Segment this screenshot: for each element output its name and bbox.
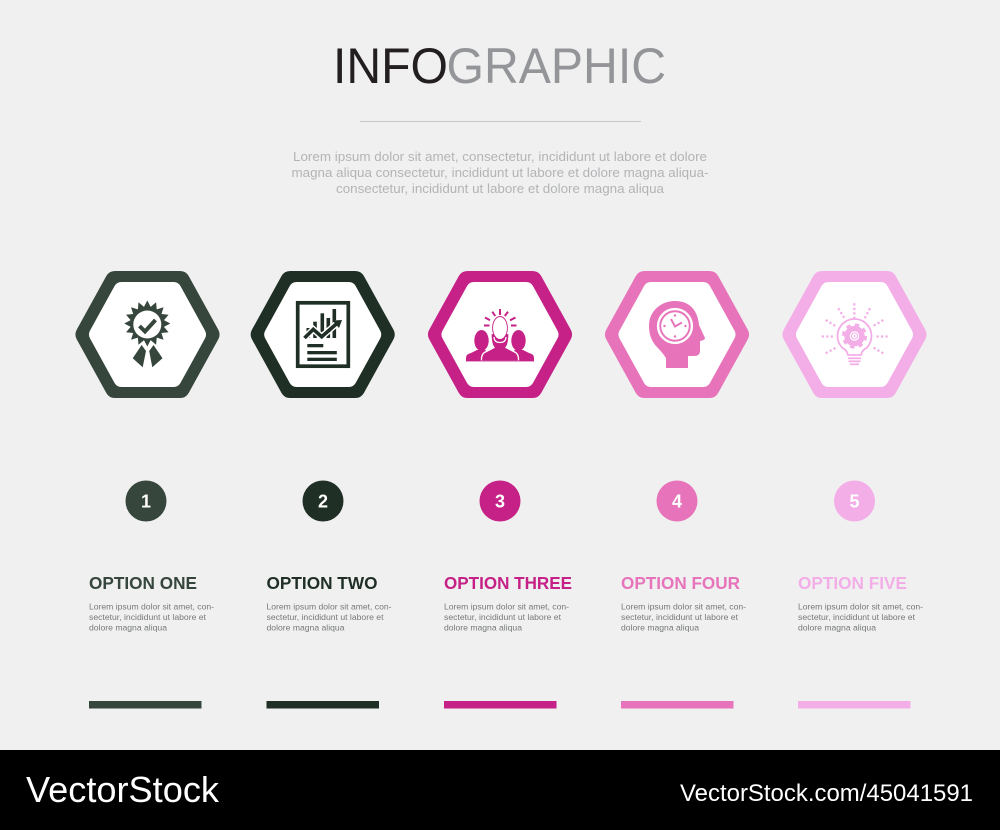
number five xyxy=(834,480,875,522)
text: option five description xyxy=(798,602,923,632)
hexagon badge five xyxy=(792,281,916,388)
icon: team with idea xyxy=(466,309,534,361)
panel: option two xyxy=(261,281,392,708)
number four xyxy=(656,480,698,522)
number one: 1 xyxy=(141,492,151,512)
hexagon badge one xyxy=(86,281,210,388)
text: option three description: sectetur, incididunt ut labore et xyxy=(444,612,562,622)
text: option one description: dolore magna aliqua xyxy=(89,622,167,632)
text: option one description: sectetur, incididunt ut labore et xyxy=(89,612,207,622)
heading: option three: OPTION THREE xyxy=(444,573,572,593)
icon: light bulb with gear xyxy=(822,303,888,364)
intro text block: consectetur, incididunt ut labore et dolore magna aliqua xyxy=(336,182,665,196)
number three: 3 xyxy=(495,492,505,512)
panel: option three xyxy=(438,281,572,708)
icon: award rosette xyxy=(124,300,170,367)
text: option four description: dolore magna aliqua xyxy=(621,622,699,632)
text: option two description: Lorem ipsum dolor sit amet, con- xyxy=(266,602,392,612)
heading: option five: OPTION FIVE xyxy=(798,573,907,593)
panel: option one xyxy=(86,281,214,708)
intro text block: magna aliqua consectetur, incididunt ut labore et dolore magna aliqua- xyxy=(292,166,708,180)
bar: option one xyxy=(89,701,202,708)
text: option one description xyxy=(89,602,214,632)
footer brand: VectorStock xyxy=(26,769,220,810)
text: option three description xyxy=(444,602,569,632)
title: GRAPHIC xyxy=(446,38,666,94)
text: option two description: sectetur, incididunt ut labore et xyxy=(266,612,384,622)
number one xyxy=(126,480,166,522)
panel: option four xyxy=(615,281,746,708)
icon: report document with chart xyxy=(298,303,348,366)
text: option four description xyxy=(621,602,746,632)
bar: option two xyxy=(266,701,379,708)
intro text block: Lorem ipsum dolor sit amet, consectetur, incididunt ut labore et dolore xyxy=(293,150,707,164)
number two: 2 xyxy=(318,492,328,512)
heading: option four: OPTION FOUR xyxy=(621,573,740,593)
title: INFO xyxy=(333,38,448,94)
footer url: VectorStock.com/45041591 xyxy=(680,780,973,807)
text: option four description: sectetur, incididunt ut labore et xyxy=(621,612,739,622)
panel: option five xyxy=(792,281,923,708)
hexagon badge two xyxy=(261,281,385,388)
heading: option two: OPTION TWO xyxy=(266,573,378,593)
bar: option five xyxy=(798,701,910,708)
text: option three description: dolore magna aliqua xyxy=(444,622,522,632)
text: option five description: Lorem ipsum dolor sit amet, con- xyxy=(798,602,923,612)
hexagon badge three xyxy=(438,281,562,388)
footer band xyxy=(0,750,1000,830)
text: option two description: dolore magna aliqua xyxy=(266,622,345,632)
text: option five description: sectetur, incididunt ut labore et xyxy=(798,612,916,622)
text: option two description xyxy=(266,602,392,632)
heading: option one: OPTION ONE xyxy=(89,573,197,593)
text: option four description: Lorem ipsum dolor sit amet, con- xyxy=(621,602,746,612)
number four: 4 xyxy=(672,492,682,512)
intro text block xyxy=(292,150,708,196)
number three xyxy=(480,480,520,522)
text: option five description: dolore magna aliqua xyxy=(798,622,876,632)
bar: option four xyxy=(621,701,734,708)
text: option three description: Lorem ipsum dolor sit amet, con- xyxy=(444,602,569,612)
bar: option three xyxy=(444,701,556,708)
title xyxy=(333,38,666,94)
icon: head with clock xyxy=(649,301,705,368)
number two xyxy=(302,480,344,522)
number five: 5 xyxy=(849,492,860,512)
hexagon badge four xyxy=(615,281,739,388)
text: option one description: Lorem ipsum dolor sit amet, con- xyxy=(89,602,214,612)
